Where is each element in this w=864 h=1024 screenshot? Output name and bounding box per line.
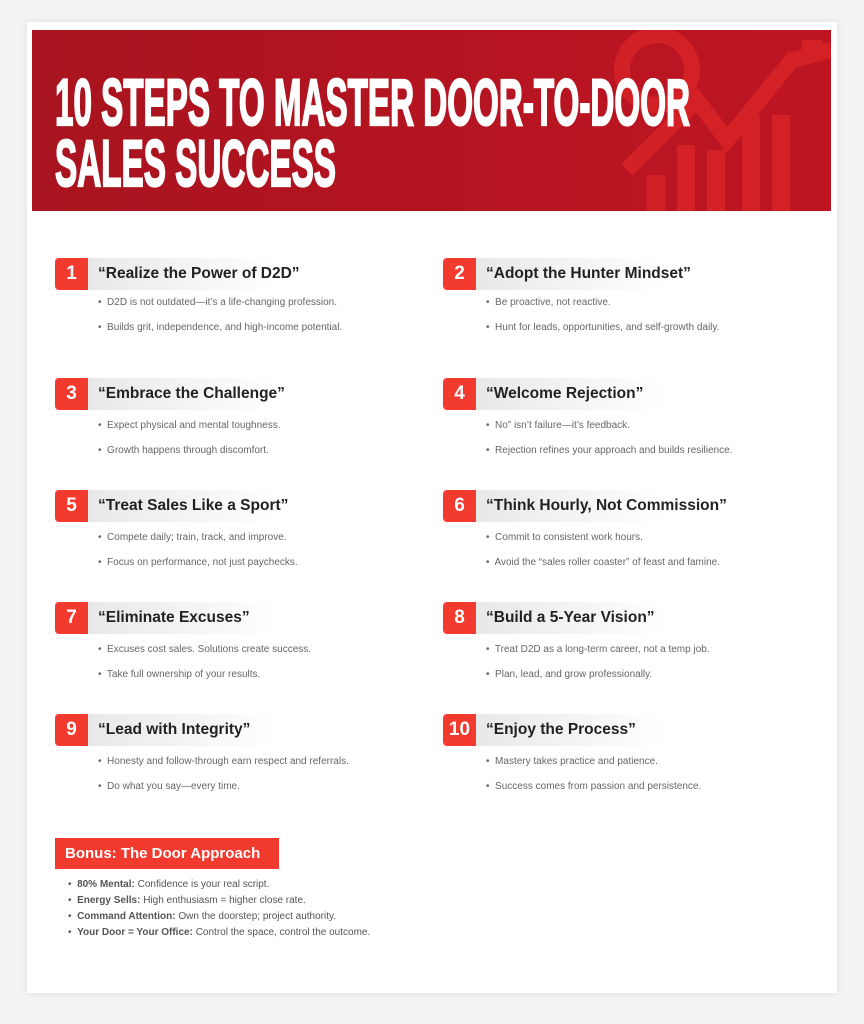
bonus list: • Energy Sells: High enthusiasm = higher close rate. [68, 895, 306, 906]
step 10: 10 [449, 719, 470, 740]
step 6: • Avoid the “sales roller coaster” of feast and famine. [486, 557, 720, 568]
step 1: 1 [66, 263, 77, 284]
step 8: 8 [454, 607, 465, 628]
step 2: 2 [454, 263, 465, 284]
step 6: 6 [454, 495, 465, 516]
step 2 [443, 258, 719, 333]
step 1 [55, 258, 342, 333]
step 1: “Realize the Power of D2D” [98, 265, 300, 282]
step 9: • Do what you say—every time. [98, 781, 240, 792]
step 4: 4 [454, 383, 465, 404]
step 5: 5 [66, 495, 77, 516]
step 6 [443, 490, 727, 568]
step 7: • Excuses cost sales. Solutions create success. [98, 644, 311, 655]
step 1: • D2D is not outdated—it’s a life-changing profession. [98, 297, 337, 308]
step 9 [55, 714, 349, 792]
bonus heading [55, 838, 279, 869]
step 1: • Builds grit, independence, and high-income potential. [98, 322, 342, 333]
step 3: • Expect physical and mental toughness. [98, 420, 280, 431]
step 8: • Plan, lead, and grow professionally. [486, 669, 652, 680]
step 7: 7 [66, 607, 77, 628]
step 7: • Take full ownership of your results. [98, 669, 260, 680]
step 4: • Rejection refines your approach and builds resilience. [486, 445, 732, 456]
step 5 [55, 490, 298, 568]
step 6: “Think Hourly, Not Commission” [486, 497, 727, 514]
step 10: “Enjoy the Process” [486, 721, 636, 738]
step 2: “Adopt the Hunter Mindset” [486, 265, 691, 282]
header banner [32, 30, 831, 211]
step 4: • No” isn’t failure—it’s feedback. [486, 420, 630, 431]
step 9: “Lead with Integrity” [98, 721, 250, 738]
step 8: • Treat D2D as a long-term career, not a temp job. [486, 644, 710, 655]
step 2: • Be proactive, not reactive. [486, 297, 611, 308]
step 4 [443, 378, 732, 456]
title [55, 65, 690, 200]
step 4: “Welcome Rejection” [486, 385, 643, 402]
step 8: “Build a 5-Year Vision” [486, 609, 655, 626]
step 2: • Hunt for leads, opportunities, and self-growth daily. [486, 322, 719, 333]
step 7 [55, 602, 311, 680]
step 9: • Honesty and follow-through earn respect and referrals. [98, 756, 349, 767]
step 9: 9 [66, 719, 77, 740]
step 8 [443, 602, 710, 680]
step 5: • Compete daily; train, track, and improve. [98, 532, 287, 543]
step 7: “Eliminate Excuses” [98, 609, 250, 626]
step 3: “Embrace the Challenge” [98, 385, 285, 402]
step 10: • Mastery takes practice and patience. [486, 756, 658, 767]
step 6: • Commit to consistent work hours. [486, 532, 643, 543]
step 3: 3 [66, 383, 77, 404]
step 10 [443, 714, 701, 792]
bonus list: • 80% Mental: Confidence is your real script. [68, 879, 269, 890]
step 3 [55, 378, 285, 456]
bonus list: • Command Attention: Own the doorstep; project authority. [68, 911, 336, 922]
step 10: • Success comes from passion and persistence. [486, 781, 701, 792]
step 5: • Focus on performance, not just paychecks. [98, 557, 298, 568]
step 3: • Growth happens through discomfort. [98, 445, 269, 456]
bonus heading: Bonus: The Door Approach [65, 845, 260, 862]
step 5: “Treat Sales Like a Sport” [98, 497, 288, 514]
bonus list: • Your Door = Your Office: Control the space, control the outcome. [68, 927, 370, 938]
bonus list [68, 879, 370, 938]
icon: chart decoration [622, 35, 831, 215]
title: SALES SUCCESS [55, 126, 336, 200]
